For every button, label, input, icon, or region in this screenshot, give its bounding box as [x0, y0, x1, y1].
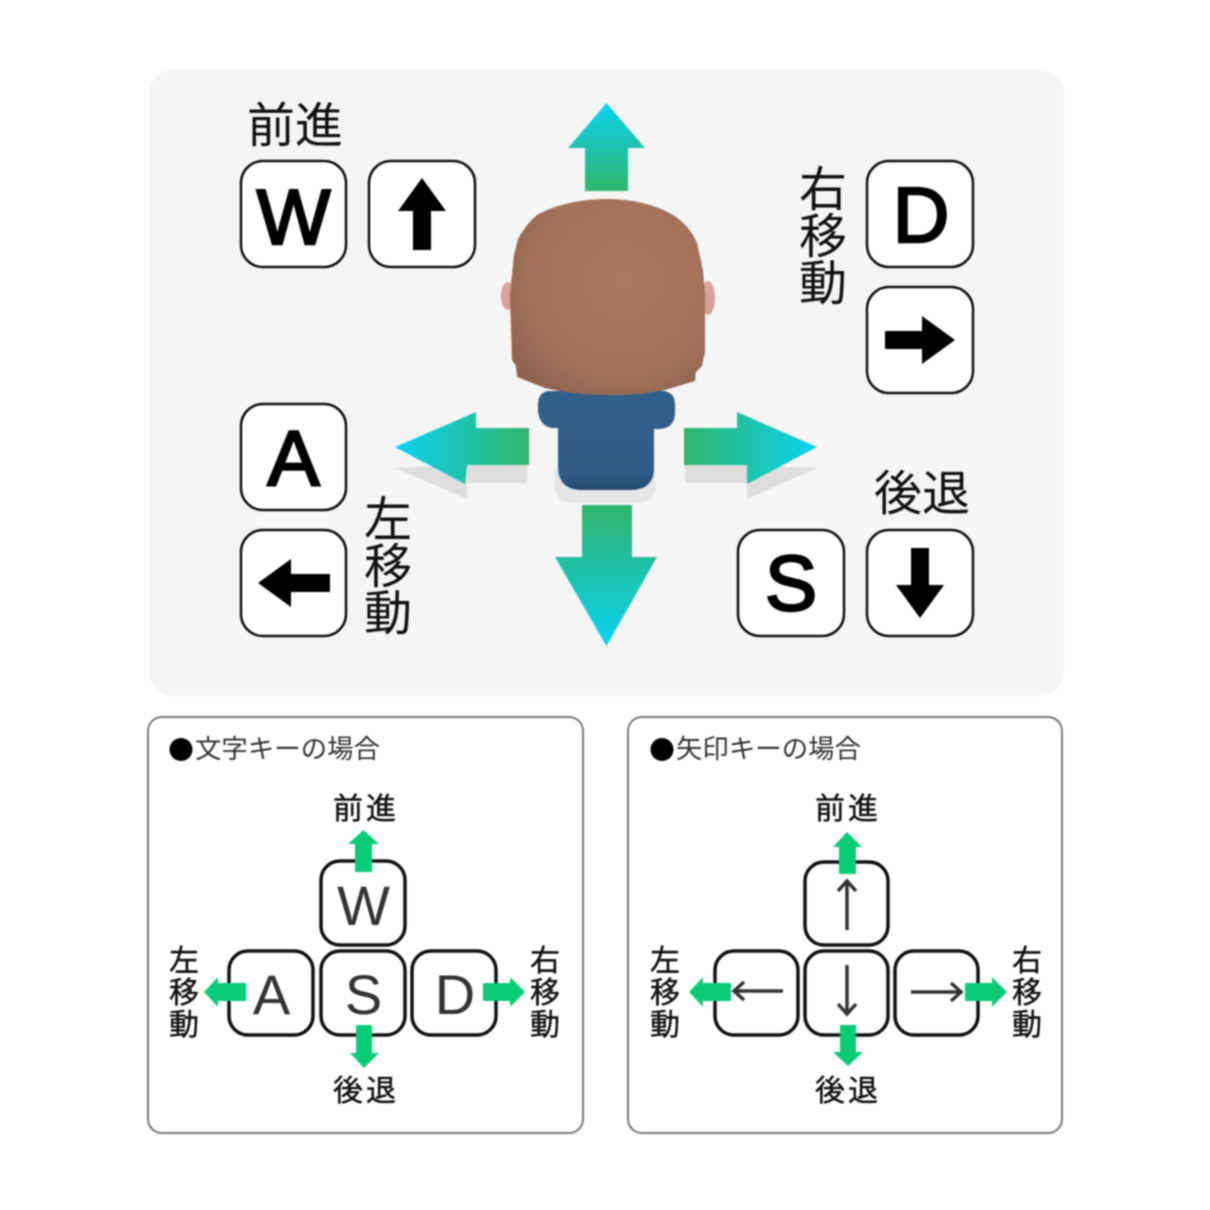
key: A: A	[267, 414, 320, 502]
key: W	[321, 861, 405, 945]
key: S	[738, 530, 844, 636]
key: A	[229, 951, 313, 1035]
label: move right: 移	[799, 211, 847, 264]
head	[510, 199, 705, 395]
arrow: backward	[555, 505, 657, 646]
key: D	[412, 951, 496, 1035]
label: move right: 動	[799, 258, 847, 311]
arrow: forward	[568, 103, 645, 191]
key: right arrow	[867, 287, 973, 393]
key: down arrow	[867, 530, 973, 636]
key: A: A	[253, 963, 291, 1026]
arrow: forward	[348, 830, 379, 872]
label: move right: 右	[530, 945, 560, 978]
key: W	[241, 161, 346, 267]
arrow: left	[395, 412, 529, 484]
key: S: S	[765, 539, 817, 627]
panel title: 矢印キーの場合	[676, 734, 861, 764]
label: move right: 移	[1012, 977, 1042, 1010]
character shadow	[555, 470, 655, 503]
key: S: S	[345, 963, 382, 1026]
panel title: 文字キーの場合	[195, 734, 380, 764]
label: move right: 右	[1012, 945, 1042, 978]
arrow shadow: left	[395, 465, 527, 499]
ears	[501, 281, 715, 315]
label: move right: 右	[799, 164, 847, 217]
arrow: right	[483, 977, 525, 1007]
label: backward: 後退	[874, 468, 970, 521]
bullet	[170, 738, 192, 761]
key: up	[805, 862, 888, 945]
key: W: W	[257, 173, 331, 261]
label: forward: 前進	[333, 793, 396, 826]
key: left	[715, 951, 798, 1035]
label: move left: 移	[650, 977, 680, 1010]
key: S	[321, 951, 405, 1035]
label: move left: 動	[650, 1009, 680, 1042]
key: A	[241, 404, 346, 510]
label: forward: 前進	[247, 100, 343, 153]
arrow: left	[204, 977, 246, 1007]
key: down	[805, 951, 888, 1035]
label: move left: 動	[364, 588, 412, 641]
label: move left: 左	[364, 494, 412, 547]
label: move right	[1012, 945, 1042, 1042]
label: move right: 動	[530, 1009, 560, 1042]
label: move left: 移	[169, 977, 199, 1010]
panel: arrow keys	[628, 717, 1062, 1133]
arrow: right	[965, 977, 1007, 1007]
arrow: forward	[833, 832, 862, 874]
arrow: left	[689, 977, 731, 1007]
label: move right	[530, 945, 560, 1042]
key: D: D	[893, 171, 949, 259]
key: up arrow	[369, 161, 475, 267]
label: move right: 移	[530, 977, 560, 1010]
label: move left: 動	[169, 1009, 199, 1042]
label: move left	[364, 494, 412, 641]
arrow: backward	[833, 1025, 863, 1066]
arrow: right	[684, 412, 817, 484]
key: D	[867, 161, 973, 267]
key: left arrow	[241, 530, 346, 636]
key: right	[895, 951, 978, 1035]
label: move right	[799, 164, 847, 311]
label: backward: 後退	[333, 1075, 396, 1108]
arrow shadow: right	[685, 465, 817, 499]
label: move right: 動	[1012, 1009, 1042, 1042]
label: forward: 前進	[815, 793, 878, 826]
panel: letter keys	[148, 717, 583, 1133]
label: move left	[650, 945, 680, 1042]
key: D: D	[435, 963, 475, 1026]
label: move left: 左	[169, 945, 199, 978]
character seen from behind	[501, 199, 715, 503]
label: move left	[169, 945, 199, 1042]
shirt	[538, 391, 675, 490]
label: backward: 後退	[815, 1075, 878, 1108]
label: move left: 移	[364, 541, 412, 594]
panel: main movement diagram	[149, 70, 1064, 696]
key: W: W	[337, 874, 390, 937]
arrow: backward	[350, 1025, 379, 1068]
bullet	[650, 738, 674, 761]
label: move left: 左	[650, 945, 680, 978]
